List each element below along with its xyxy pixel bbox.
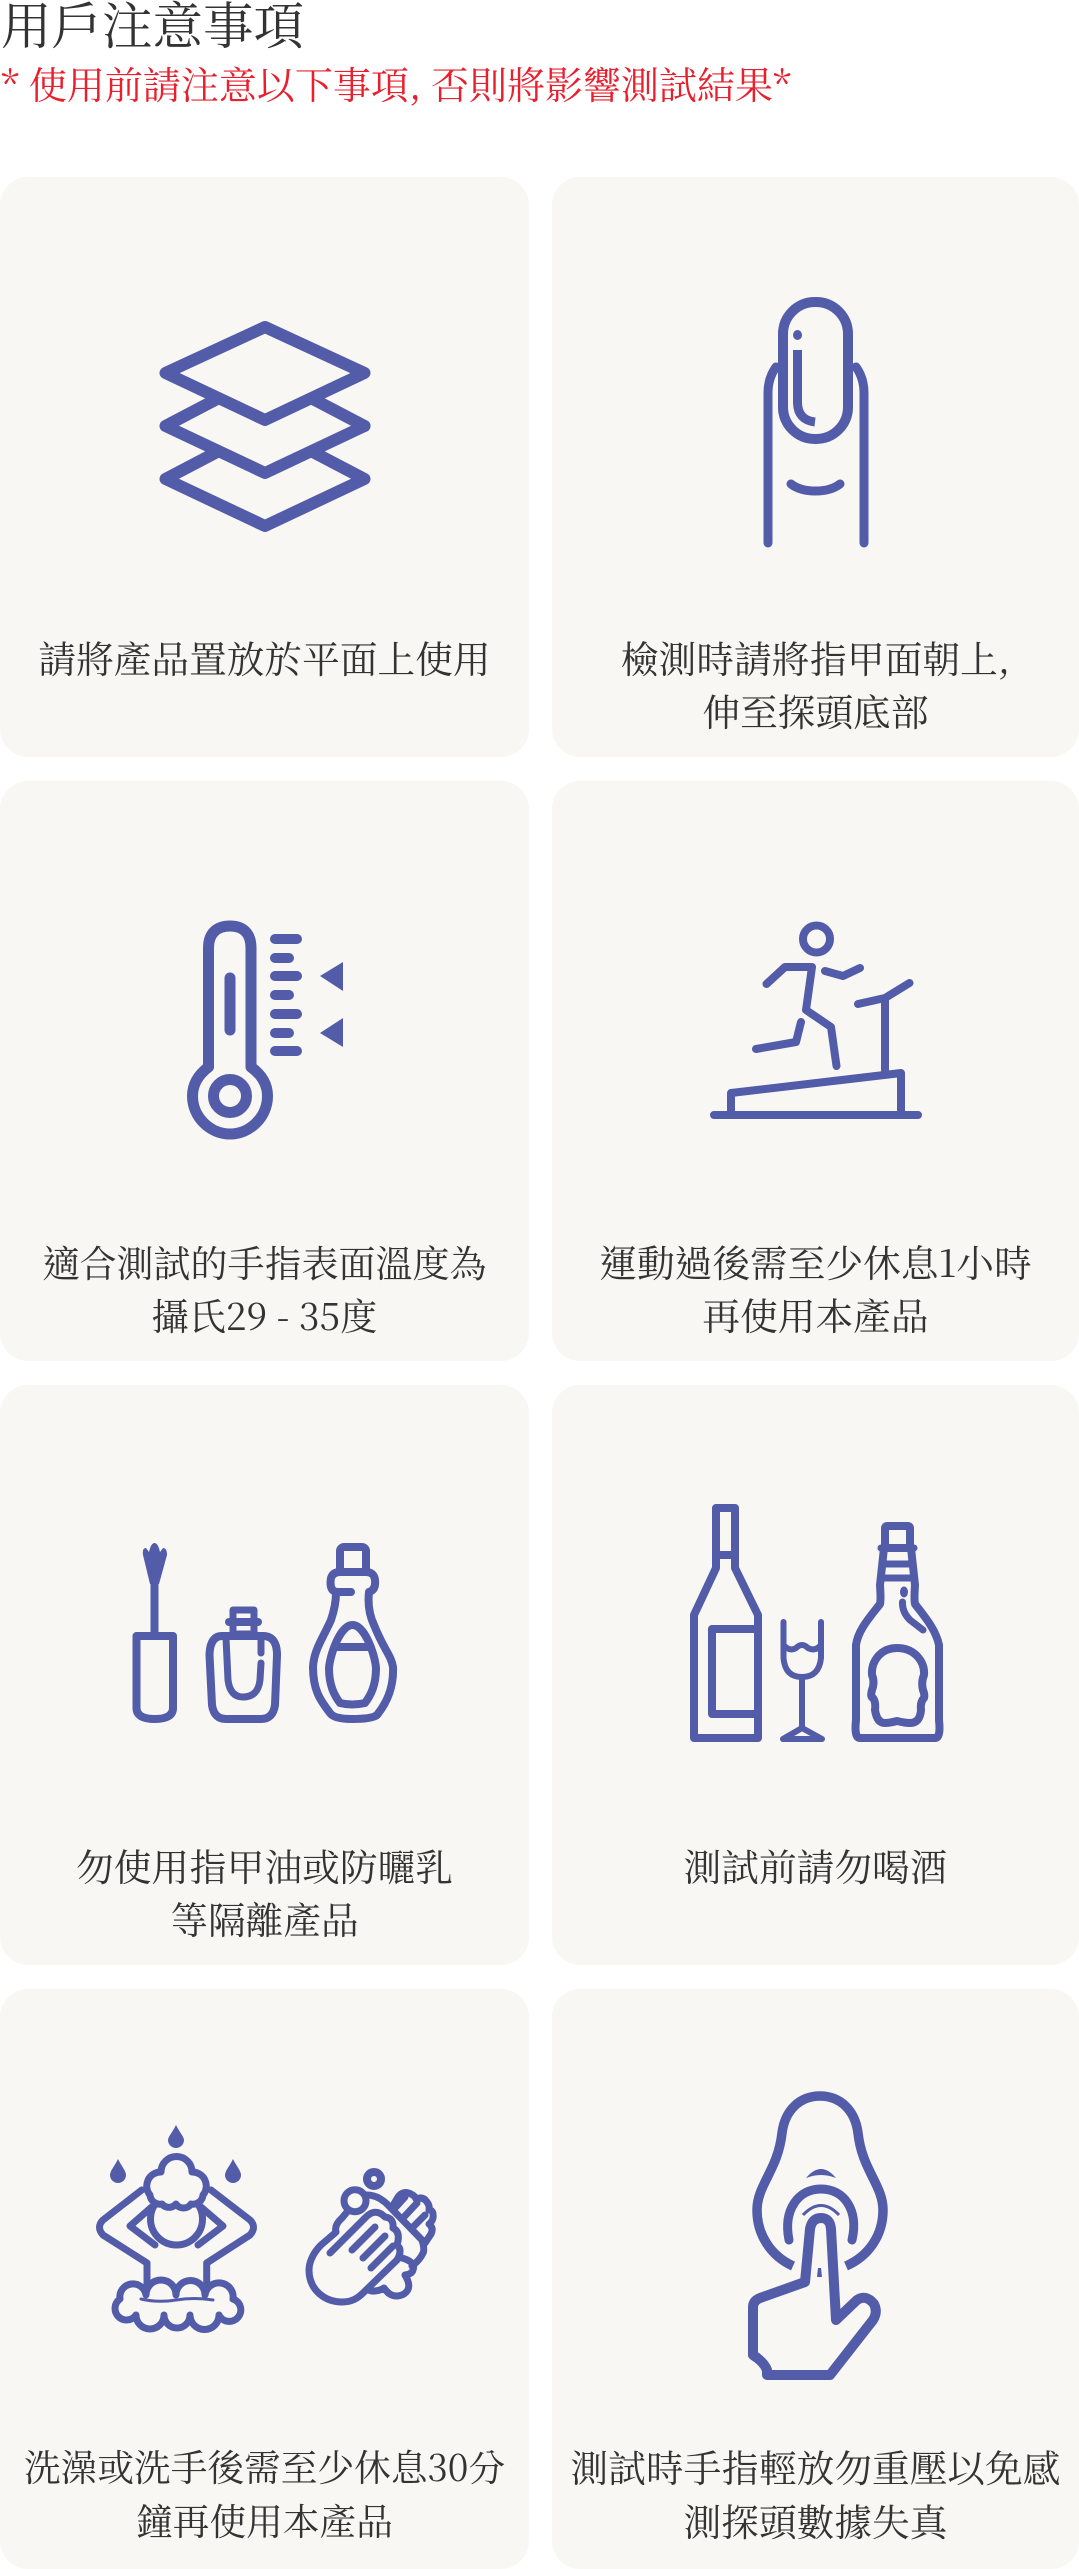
caption: 攝氏29 - 35度: [152, 1287, 377, 1341]
caption: 測探頭數據失真: [684, 2493, 947, 2547]
panel: flat surface: [0, 177, 529, 757]
warning subtitle: * 使用前請注意以下事項, 否則將影響測試結果*: [1, 55, 791, 110]
caption: 再使用本產品: [702, 1287, 929, 1341]
panel: skin temperature: [0, 781, 529, 1361]
caption: 伸至探頭底部: [702, 683, 929, 737]
icon: shower and hand washing: [96, 2125, 437, 2333]
caption: 適合測試的手指表面溫度為: [42, 1234, 486, 1288]
icon: wine bottle and glass and whiskey: [690, 1504, 944, 1742]
caption: [621, 630, 1010, 737]
panel: after washing: [0, 1989, 529, 2569]
caption: 運動過後需至少休息1小時: [599, 1234, 1032, 1288]
caption: 勿使用指甲油或防曬乳: [76, 1838, 453, 1892]
caption: 檢測時請將指甲面朝上,: [621, 630, 1010, 684]
panel: after exercise: [552, 781, 1079, 1361]
icon: runner on treadmill: [710, 922, 922, 1119]
panel: no alcohol: [552, 1385, 1079, 1965]
caption: [24, 2440, 505, 2546]
caption: 等隔離產品: [170, 1891, 359, 1945]
icon: thermometer: [187, 920, 343, 1140]
icon: nail polish and cosmetics: [132, 1543, 398, 1723]
panel: no nail polish or sunscreen: [0, 1385, 529, 1965]
caption: 測試前請勿喝酒: [684, 1838, 947, 1892]
icon: stacked layers: [160, 321, 370, 532]
panel: fingernail position: [552, 177, 1079, 757]
icon: finger with nail: [764, 297, 868, 548]
caption: 請將產品置放於平面上使用: [38, 630, 491, 684]
caption: [42, 1234, 486, 1341]
panel: press lightly: [552, 1989, 1079, 2569]
caption: 鐘再使用本產品: [136, 2494, 393, 2546]
caption: [76, 1838, 453, 1945]
icon: finger pressing probe: [748, 2091, 888, 2380]
caption: 洗澡或洗手後需至少休息30分: [24, 2440, 505, 2492]
caption: [571, 2439, 1060, 2547]
caption: [599, 1234, 1032, 1341]
caption: 測試時手指輕放勿重壓以免感: [571, 2439, 1060, 2493]
